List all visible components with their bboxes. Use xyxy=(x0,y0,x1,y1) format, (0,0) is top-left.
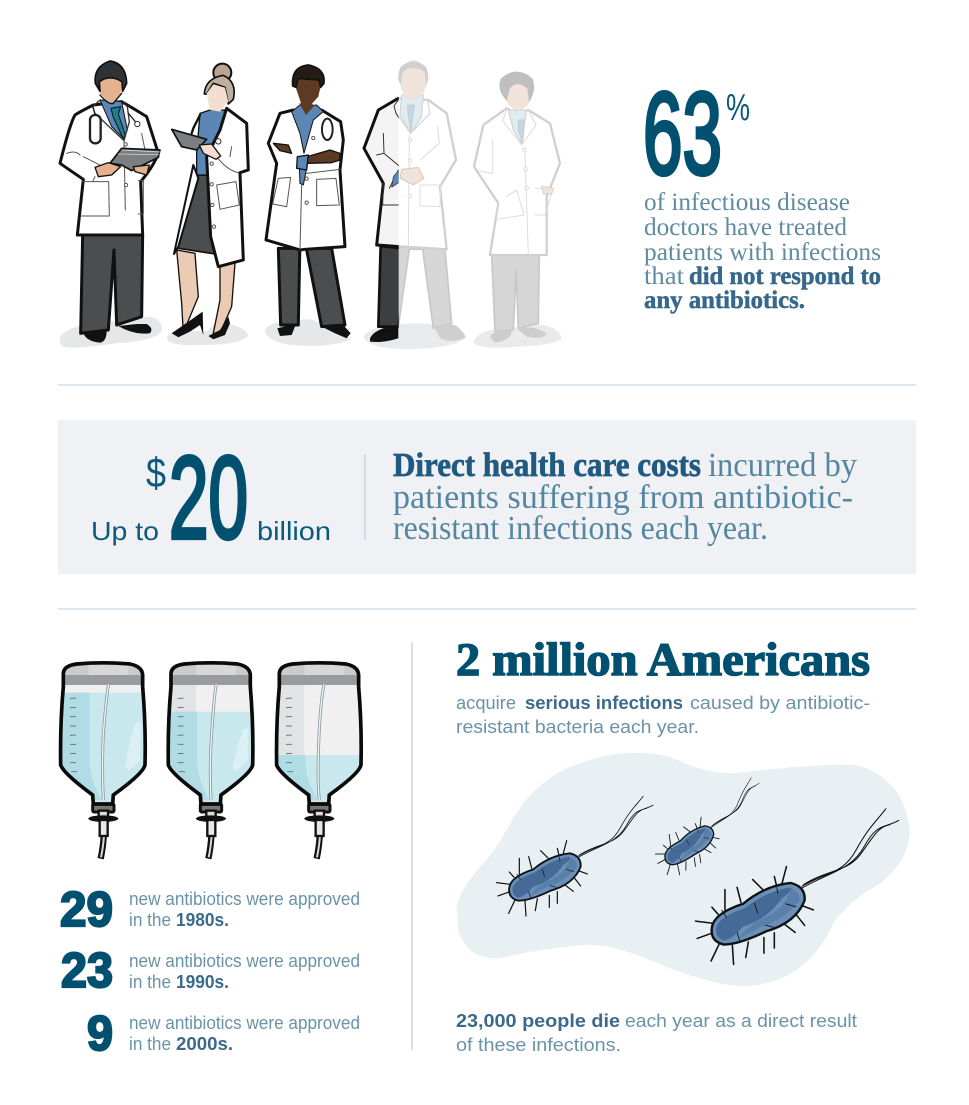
row 2000s: 9 xyxy=(87,1007,113,1061)
big number 63: 63 xyxy=(643,68,722,199)
bacterium 1 xyxy=(497,796,653,916)
statistic: 63% xyxy=(643,68,881,314)
doctor 1 xyxy=(60,61,162,348)
illustration: five doctors xyxy=(60,60,562,349)
row 1980s: 1980s. xyxy=(176,910,229,930)
bacterium 3 xyxy=(695,808,899,964)
row 1980s: in the xyxy=(129,910,171,930)
doctor 4 (half faded) xyxy=(363,60,467,349)
description: of infectious disease xyxy=(644,189,850,216)
text: deaths xyxy=(456,1011,857,1055)
row 1990s: 23 xyxy=(61,944,113,998)
list: antibiotics approved per decade xyxy=(60,883,360,1061)
bacterium 2 xyxy=(647,777,770,878)
row 1980s: 29 xyxy=(60,883,113,937)
text: serious infections: serious infections xyxy=(525,693,683,713)
panel: health care costs xyxy=(58,420,916,574)
description: that xyxy=(644,263,684,290)
illustration: bacteria xyxy=(457,753,910,987)
text: deaths: of these infections. xyxy=(456,1035,621,1055)
description: doctors have treated xyxy=(644,214,848,241)
costs description: patients suffering from antibiotic- xyxy=(393,479,853,516)
doctor 3 xyxy=(265,65,351,346)
description: patients with infections xyxy=(644,239,881,266)
row 2000s: new antibiotics were approved xyxy=(129,1013,360,1033)
heading: 2 million Americans: 2 million Americans xyxy=(456,634,870,686)
dollar sign: $ xyxy=(146,449,166,496)
row 2000s xyxy=(87,1007,360,1061)
row 2000s: 2000s. xyxy=(176,1034,233,1054)
description xyxy=(644,189,881,314)
row 1990s xyxy=(61,944,360,998)
label: up to: Up to xyxy=(91,516,159,546)
bottle 1990s xyxy=(164,660,258,859)
costs description: resistant infections each year. xyxy=(393,510,768,547)
text: serious infections: caused by antibiotic- xyxy=(690,693,870,713)
doctor 2 xyxy=(167,64,248,345)
description: any antibiotics. xyxy=(644,287,805,314)
costs description: incurred by xyxy=(708,447,857,484)
label: billion: billion xyxy=(257,516,331,546)
bottle 2000s xyxy=(273,660,366,859)
percent sign: % xyxy=(726,87,750,129)
row 1980s xyxy=(60,883,360,937)
doctor 5 (faded) xyxy=(473,72,562,348)
text: serious infections: acquire xyxy=(456,693,516,713)
costs description: Direct health care costs xyxy=(393,447,701,484)
costs description xyxy=(393,447,857,547)
bottle 1980s xyxy=(57,660,150,859)
row 1990s: 1990s. xyxy=(176,972,229,992)
row 1990s: in the xyxy=(129,972,171,992)
big number 20: 20 xyxy=(169,432,248,563)
text: serious infections xyxy=(456,693,870,737)
illustration: three IV bottles xyxy=(57,660,366,859)
row 1990s: new antibiotics were approved xyxy=(129,951,360,971)
text: deaths: each year as a direct result xyxy=(625,1011,857,1031)
row 1980s: new antibiotics were approved xyxy=(129,889,360,909)
row 2000s: in the xyxy=(129,1034,171,1054)
text: serious infections: resistant bacteria each year. xyxy=(456,717,699,737)
description: did not respond to xyxy=(689,263,881,290)
text: deaths: 23,000 people die xyxy=(456,1011,620,1031)
